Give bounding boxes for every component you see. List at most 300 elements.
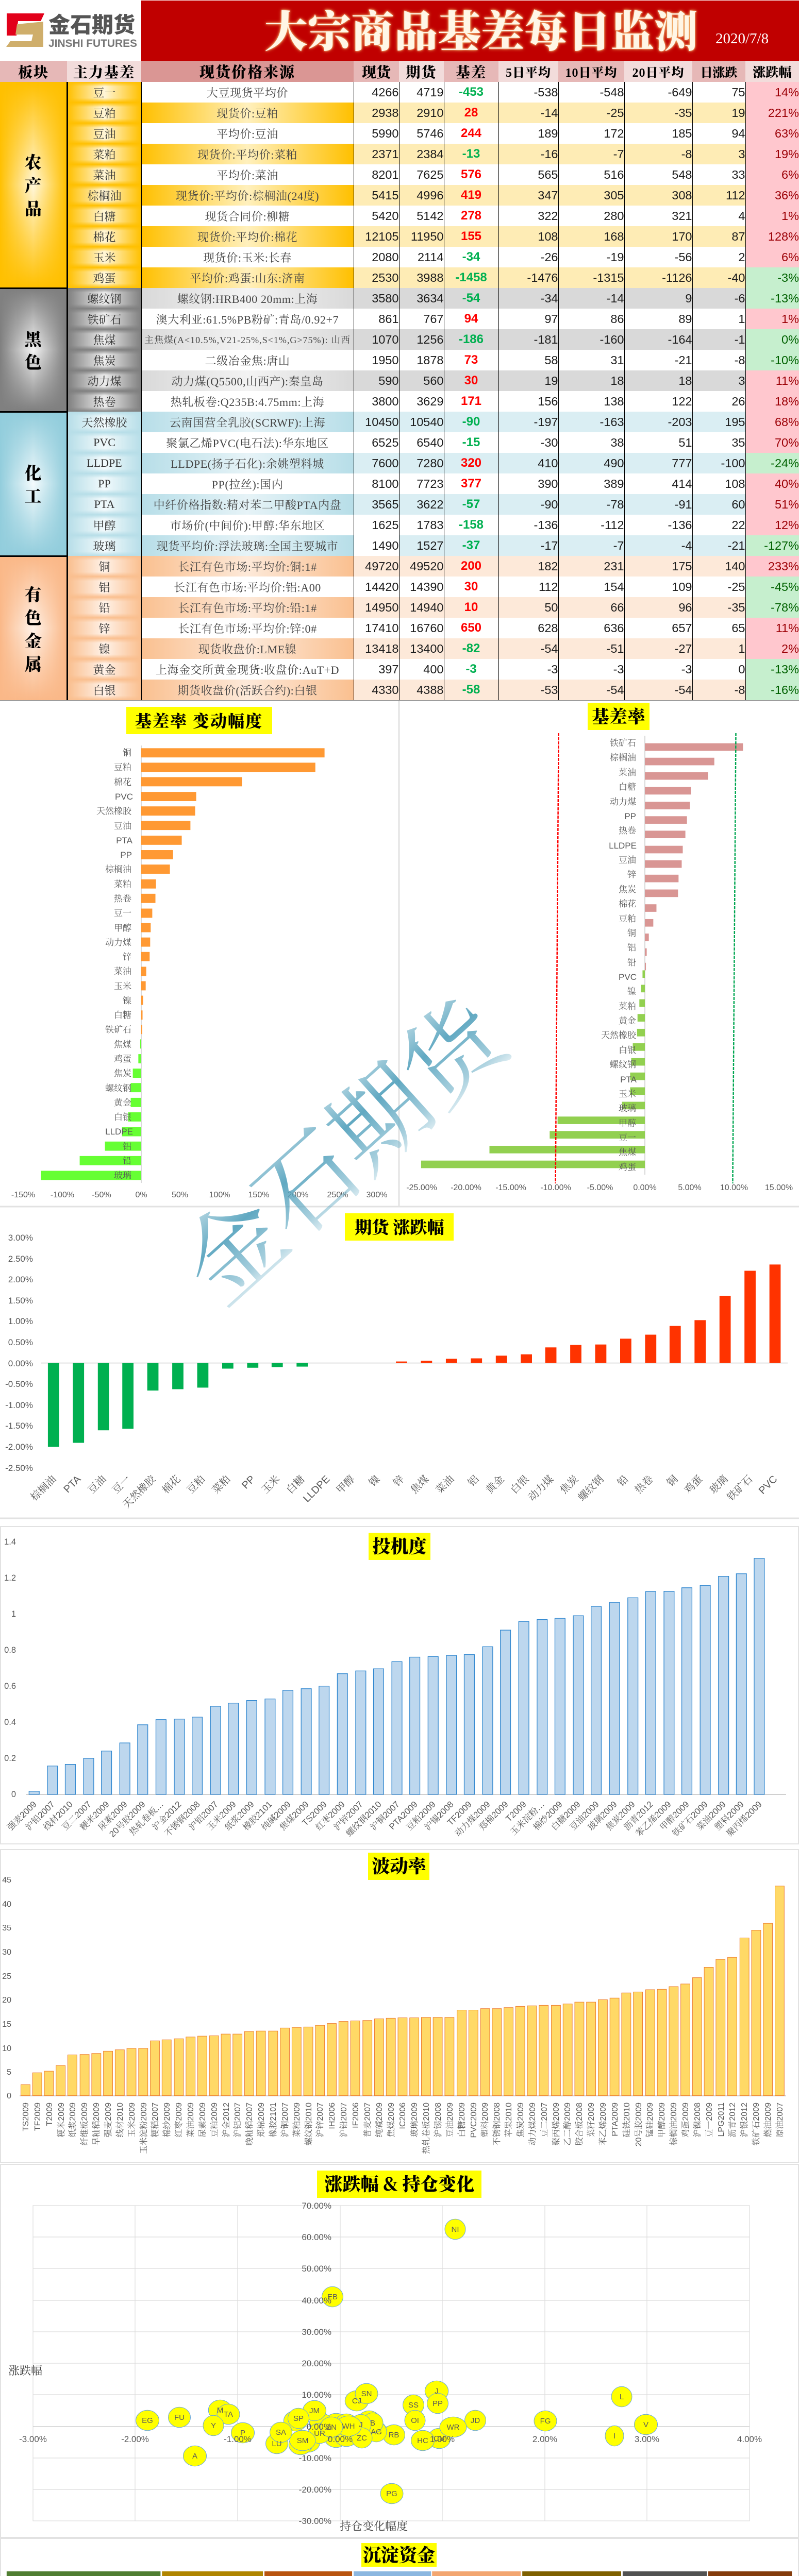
table header row: -4 <box>681 539 692 552</box>
axis ticks <box>11 1191 387 1199</box>
table header row: 89 <box>678 312 692 326</box>
table header row: 322 <box>538 209 558 223</box>
category labels: 棕榈油 <box>105 865 131 874</box>
category labels: 塑料2009 <box>480 2103 490 2138</box>
category labels: 沪锡2008 <box>434 2103 443 2138</box>
table header row: -37 <box>462 538 480 552</box>
table header row: 1950 <box>372 353 399 367</box>
chart: 投机度 column chart <box>4 1533 786 1839</box>
table header row: 636 <box>604 621 624 635</box>
table header row: -54 <box>607 683 624 697</box>
value axis: 0 <box>7 2092 11 2100</box>
value axis: 1.4 <box>4 1537 16 1547</box>
axis ticks: -100% <box>51 1191 74 1199</box>
value axis <box>4 1537 16 1799</box>
axis ticks: 15.00% <box>765 1183 793 1192</box>
category labels: 玻璃 <box>619 1104 636 1113</box>
table header row: 菜油 <box>93 169 115 181</box>
row: 螺纹钢: -14 <box>607 292 624 305</box>
logo: Jinshi Futures: 金石期货 <box>48 8 135 39</box>
table header row: 涨跌幅 <box>753 66 792 79</box>
table header row: 1490 <box>372 539 399 552</box>
row: 豆一: 14% <box>775 86 799 99</box>
row: 豆一: -538 <box>534 86 558 99</box>
table header row: -56 <box>675 250 692 264</box>
bubble labels <box>142 2225 648 2498</box>
value axis: 35 <box>2 1924 11 1933</box>
category labels: 不锈钢2008 <box>492 2103 502 2146</box>
table header row: 玻璃 <box>93 540 115 552</box>
category labels: 铁矿石 <box>610 738 636 748</box>
table header row: 8201 <box>372 168 399 181</box>
category labels: 豆油 <box>86 1473 109 1496</box>
logo: Jinshi Futures: JINSHI FUTURES <box>48 38 137 49</box>
category labels: 棉花 <box>160 1473 183 1496</box>
table header row: -16% <box>771 683 799 697</box>
row: 天然橡胶: -163 <box>600 415 624 429</box>
table header row: 6% <box>781 250 799 264</box>
axis ticks: -50% <box>92 1191 111 1199</box>
category labels: 纤维板2009 <box>80 2103 89 2146</box>
table header row: 10 <box>464 600 478 614</box>
table header row: 现货价:豆粕 <box>217 107 278 120</box>
table header row: 长江有色市场:平均价:铅:1# <box>178 602 317 614</box>
table header row: 628 <box>538 621 558 635</box>
category labels: 焦煤2009 <box>278 1799 311 1833</box>
category labels: 锰硅2009 <box>645 2103 655 2138</box>
table header row: 菜粕 <box>93 148 115 161</box>
table header row: -164 <box>668 333 692 346</box>
category labels: 铅 <box>615 1473 631 1489</box>
table header row: 5420 <box>372 209 399 223</box>
category labels: PTA <box>116 836 133 845</box>
category labels: 锌 <box>627 870 636 879</box>
table header row: 日涨跌 <box>700 66 737 80</box>
table header row: 189 <box>538 127 558 140</box>
bubble labels: SA <box>276 2428 286 2437</box>
category labels: 聚丙烯2009 <box>724 1799 764 1839</box>
table header row: 农 <box>25 149 42 174</box>
category labels: 黄金 <box>619 1016 636 1026</box>
bubble labels: AG <box>371 2428 382 2436</box>
category labels: PP <box>120 850 132 860</box>
row: 铜: 49520 <box>410 560 443 573</box>
category labels: PVC <box>619 972 637 982</box>
category labels: TS2009 <box>300 1799 329 1828</box>
category labels <box>601 738 637 1172</box>
row: 豆一: 豆一 <box>93 87 115 99</box>
table header row: 现货收盘价:LME镍 <box>198 643 296 655</box>
category labels: 菜油 <box>619 768 636 777</box>
heading: 期货 涨跌幅: 期货 涨跌幅 <box>355 1214 444 1239</box>
table header row: 565 <box>538 168 558 181</box>
axis ticks: 50% <box>172 1191 188 1199</box>
category labels: 尿素2009 <box>198 2103 207 2138</box>
table header row: 66 <box>610 601 624 614</box>
axis ticks: 0% <box>135 1191 147 1199</box>
table header row: 86 <box>610 312 624 326</box>
bubble labels: FU <box>174 2413 185 2422</box>
table header row: 白银 <box>93 684 115 697</box>
table header row: 73 <box>464 353 478 367</box>
category labels: 豆一 <box>110 1473 133 1496</box>
table header row: 鸡蛋 <box>93 272 115 284</box>
table header row: 156 <box>538 395 558 408</box>
category labels: 沪银2012 <box>740 2103 749 2138</box>
table header row: -1 <box>735 333 745 346</box>
table header row: -7 <box>613 147 624 161</box>
y axis ticks: 40.00% <box>302 2296 331 2306</box>
table header row: 11950 <box>411 230 443 243</box>
value axis: 30 <box>2 1948 11 1957</box>
table header row: 657 <box>672 621 692 635</box>
table header row: -35 <box>675 106 692 120</box>
table header row: 13418 <box>365 642 399 655</box>
table header row: -186 <box>459 332 484 346</box>
table header row: 128% <box>768 230 799 243</box>
table header row: 5415 <box>372 189 399 202</box>
table header row: 63% <box>775 127 799 140</box>
chart: 基差率 变动幅度 bar chart <box>11 707 387 1199</box>
table header row: 现货价:平均价:菜粕 <box>197 148 297 161</box>
category labels: 镍 <box>627 987 636 996</box>
table header row: -1126 <box>662 271 692 284</box>
axis ticks: 100% <box>209 1191 230 1199</box>
bubble labels: J <box>435 2387 439 2396</box>
table header row: -181 <box>534 333 558 346</box>
category labels: 焦炭 <box>114 1069 131 1078</box>
threshold line: +10% <box>733 733 736 1183</box>
table header row: 1625 <box>372 518 399 532</box>
table header row: 3 <box>738 374 745 387</box>
table header row: -78% <box>771 601 799 614</box>
table header row: -127% <box>764 539 799 552</box>
bubble labels: HC <box>417 2436 428 2445</box>
table header row: 560 <box>423 374 443 387</box>
category labels: 玉米2009 <box>205 1799 238 1833</box>
table header row: 51 <box>678 436 692 449</box>
table header row: -8 <box>735 683 745 697</box>
bubble labels: JD <box>471 2416 480 2425</box>
table header row: 96 <box>678 601 692 614</box>
category labels: 橡胶2101 <box>269 2103 278 2138</box>
table header row: 490 <box>604 456 624 470</box>
table header row: 11% <box>776 621 799 635</box>
row: 天然橡胶 <box>0 412 799 555</box>
table header row: 2 <box>738 250 745 264</box>
category labels: IF2006 <box>352 2103 360 2128</box>
axis ticks: 10.00% <box>720 1183 748 1192</box>
category labels: 天然橡胶 <box>601 1030 637 1040</box>
table header row: 长江有色市场:平均价:锌:0# <box>178 622 317 635</box>
category labels: 胶合板2008 <box>575 2103 584 2146</box>
row: 豆一: 大豆现货平均价 <box>207 87 288 99</box>
treemap tiles <box>7 2571 792 2576</box>
table header row: 172 <box>604 127 624 140</box>
table header row: 221% <box>768 106 799 120</box>
category labels: 鸡蛋 <box>619 1162 636 1172</box>
category labels: 菜粕 <box>210 1473 233 1496</box>
x axis ticks: 3.00% <box>635 2434 659 2444</box>
category labels: 菜油 <box>434 1473 457 1496</box>
row: 铜: 140 <box>725 560 745 573</box>
row: 豆一: 4719 <box>417 86 443 99</box>
row: 豆一: 75 <box>731 86 745 99</box>
bubble labels: SS <box>408 2401 419 2410</box>
category labels <box>6 1799 764 1839</box>
category labels: T2009 <box>504 1799 528 1824</box>
bubble labels: CU <box>434 2434 445 2443</box>
table header row: 7625 <box>417 168 443 181</box>
category labels: 豆一2009 <box>705 2103 714 2138</box>
heading: 投机度: 投机度 <box>372 1533 427 1558</box>
category labels: 纸浆2009 <box>68 2103 77 2138</box>
table header row: 410 <box>538 456 558 470</box>
table header row: 长江有色市场:平均价:铝:A00 <box>174 581 321 594</box>
table header row: -51 <box>607 642 624 655</box>
category labels: 甲醇2009 <box>657 2103 667 2138</box>
bubble labels: NI <box>452 2225 459 2234</box>
category labels: 铁矿石 <box>105 1025 131 1035</box>
axis ticks <box>406 1183 793 1192</box>
table header row: 97 <box>544 312 558 326</box>
category labels: 铜 <box>627 928 636 938</box>
row: 铜: 233% <box>768 560 799 573</box>
x axis ticks: -1.00% <box>224 2434 252 2444</box>
category labels: 20号胶2009 <box>634 2103 643 2146</box>
table header row: 414 <box>672 477 692 490</box>
table header row: 5142 <box>417 209 443 223</box>
category labels: LLDPE <box>609 841 637 851</box>
table header row: -27 <box>675 642 692 655</box>
chart: 波动率 column chart <box>2 1853 786 2154</box>
category labels: 热卷 <box>114 894 131 904</box>
category labels: PVC <box>115 792 133 802</box>
category labels: 燃油2009 <box>763 2103 773 2138</box>
bubbles <box>136 2219 658 2504</box>
value axis: 0.4 <box>4 1718 16 1727</box>
table header row: 现货平均价:浮法玻璃:全国主要城市 <box>157 540 338 552</box>
table header row: 2384 <box>417 147 443 161</box>
bubble labels: I <box>613 2432 615 2441</box>
value axis: 0.00% <box>8 1359 33 1368</box>
category labels: 焦煤 <box>114 1040 131 1049</box>
category labels: 菜籽2009 <box>587 2103 596 2138</box>
category labels: 沪镍2008 <box>693 2103 702 2138</box>
table header row: 0% <box>781 333 799 346</box>
table header row: LLDPE(扬子石化):余姚塑料城 <box>171 457 324 470</box>
category labels: 塑料2009 <box>713 1799 746 1833</box>
row: 螺纹钢: 螺纹钢:HRB400 20mm:上海 <box>177 293 318 305</box>
report date: 2020/7/8 <box>715 30 769 47</box>
category labels: 棉纱2009 <box>162 2103 172 2138</box>
category labels: 菜油2009 <box>695 1799 728 1833</box>
axis ticks: -150% <box>11 1191 35 1199</box>
category labels: 热轧卷板2010 <box>422 2103 431 2154</box>
table header row: 2910 <box>417 106 443 120</box>
table header row: 中纤价格指数:精对苯二甲酸PTA内盘 <box>154 499 341 511</box>
axis ticks: 250% <box>327 1191 348 1199</box>
bubble labels: A <box>192 2452 197 2461</box>
table header row: 58 <box>544 353 558 367</box>
table header row: PP <box>98 477 111 490</box>
table header row: 19 <box>544 374 558 387</box>
row: 螺纹钢: -6 <box>735 292 745 305</box>
bubble labels: EG <box>142 2416 153 2425</box>
category labels: 玉米淀粉2009 <box>139 2103 148 2154</box>
table header row: 18 <box>610 374 624 387</box>
table header row: 黄金 <box>93 664 115 676</box>
table header row: 347 <box>538 189 558 202</box>
table header row: 305 <box>604 189 624 202</box>
category labels: 白糖 <box>114 1010 131 1020</box>
table header row: 280 <box>604 209 624 223</box>
chart: 基差率 bar chart <box>406 703 793 1192</box>
value axis: 1 <box>11 1609 16 1619</box>
table header row: 现货合同价:柳糖 <box>205 210 290 223</box>
category labels: PTA <box>62 1473 84 1495</box>
table header row: 期货 <box>406 65 437 80</box>
category labels: 沪铝2007 <box>187 1799 220 1833</box>
table header row: 期货收盘价(活跃合约):白银 <box>177 684 318 697</box>
table header row: 590 <box>378 374 399 387</box>
bubble labels: P <box>240 2429 245 2437</box>
table header row: 5990 <box>372 127 399 140</box>
value axis: 0 <box>11 1790 16 1799</box>
row: 铜: 175 <box>672 560 692 573</box>
value axis: 40 <box>2 1900 11 1909</box>
category labels: 焦煤 <box>408 1473 431 1496</box>
category labels: 玉米淀粉… <box>508 1799 546 1837</box>
value axis: -1.50% <box>5 1421 33 1431</box>
table header row: 13400 <box>410 642 443 655</box>
row: 铜: 200 <box>461 559 481 573</box>
table header row: -21 <box>728 539 745 552</box>
category labels: 沪锡2008 <box>423 1799 456 1833</box>
category labels: 铅 <box>627 958 636 968</box>
category labels <box>22 2103 785 2154</box>
y axis ticks: 20.00% <box>302 2359 331 2368</box>
table header row: 60 <box>731 498 745 511</box>
table header row: 390 <box>538 477 558 490</box>
value axis: 20 <box>2 1996 11 2005</box>
axis ticks: 300% <box>367 1191 387 1199</box>
category labels: 鸡蛋2009 <box>681 2103 690 2138</box>
value axis: -2.00% <box>5 1442 33 1452</box>
value axis: 0.50% <box>8 1337 33 1347</box>
table header row: 黑 <box>25 326 42 350</box>
category labels: 沥青2012 <box>728 2103 737 2138</box>
table header row: 861 <box>378 312 399 326</box>
logo: Jinshi Futures <box>0 0 141 61</box>
category labels: 动力煤 <box>610 797 636 807</box>
table header row: -57 <box>462 497 480 511</box>
table header row: 现货价:平均价:棉花 <box>197 231 297 243</box>
table header row: 锌 <box>98 622 110 635</box>
category labels: TS2009 <box>22 2103 30 2131</box>
table header row: 94 <box>731 127 745 140</box>
table header row: -3 <box>681 663 692 676</box>
category labels: 线材2010 <box>115 2103 125 2138</box>
axis ticks: -15.00% <box>495 1183 526 1192</box>
table header row: -3 <box>465 662 477 676</box>
table header row: -90 <box>541 498 558 511</box>
value axis: 0.6 <box>4 1682 16 1691</box>
value axis: 5 <box>7 2068 11 2077</box>
table header row: -3 <box>547 663 558 676</box>
heading: 基差率: 基差率 <box>592 703 646 728</box>
bubble labels: EB <box>327 2293 338 2301</box>
value axis: 1.2 <box>4 1573 16 1583</box>
row: 天然橡胶: -90 <box>462 415 480 429</box>
table header row: -16 <box>541 147 558 161</box>
value axis: -0.50% <box>5 1379 33 1389</box>
table header row: 108 <box>538 230 558 243</box>
category labels: TF2009 <box>34 2103 42 2131</box>
category labels: 铝 <box>627 943 636 953</box>
table header row: 化 <box>25 460 42 484</box>
category labels: 晚籼稻2007 <box>245 2103 254 2146</box>
row: 天然橡胶: -203 <box>668 415 692 429</box>
table header row: 112 <box>539 580 558 594</box>
table header row: 有 <box>25 582 42 606</box>
table header row: -112 <box>601 518 624 532</box>
table header row: 现货价:平均价:棕榈油(24度) <box>176 190 319 202</box>
table header row: 4330 <box>372 683 399 697</box>
table header row: 主焦煤(A<10.5%,V21-25%,S<1%,G>75%): 山西 <box>144 335 351 345</box>
category labels: 焦炭2009 <box>604 1799 637 1833</box>
category labels: 镍 <box>367 1473 382 1489</box>
value axis: 10 <box>2 2044 11 2053</box>
y axis ticks: -30.00% <box>299 2516 331 2526</box>
table header row: 33 <box>731 168 745 181</box>
table header row: PTA <box>94 498 114 511</box>
value axis: -2.50% <box>5 1463 33 1473</box>
category labels: 强麦2009 <box>6 1799 39 1833</box>
table header row: -35 <box>728 601 745 614</box>
table header row: LLDPE <box>87 456 122 469</box>
table header row: -78 <box>607 498 624 511</box>
table header row: 28 <box>464 106 478 120</box>
category labels: 焦炭 <box>558 1473 581 1496</box>
category labels: 纸浆2009 <box>223 1799 256 1833</box>
table header row: 4996 <box>417 189 443 202</box>
value axis: 1.50% <box>8 1296 33 1306</box>
table header row: 铝 <box>98 581 110 594</box>
table header row: 3 <box>738 147 745 161</box>
table header row: 铁矿石 <box>87 313 122 326</box>
category labels: 玻璃 <box>114 1171 131 1180</box>
category labels: 沪锌2007 <box>315 2103 325 2138</box>
table header row: 16760 <box>410 621 443 635</box>
table header row: 154 <box>604 580 624 594</box>
table header row: -24% <box>771 456 799 470</box>
table header row: -19 <box>607 250 624 264</box>
table header row: -8 <box>735 353 745 367</box>
x axis ticks: 1.00% <box>430 2434 455 2444</box>
table header row: 377 <box>461 477 481 490</box>
category labels: 白糖2009 <box>457 2103 467 2138</box>
category labels: 豆一 <box>114 908 131 918</box>
table header row: 6525 <box>372 436 399 449</box>
table header row: -1476 <box>527 271 558 284</box>
table header row: 419 <box>461 188 481 202</box>
heading: 涨跌幅 & 持仓变化: 涨跌幅 & 持仓变化 <box>325 2171 474 2196</box>
bubble labels: J <box>359 2420 363 2429</box>
table header row: 1878 <box>417 353 443 367</box>
table header row: -8 <box>681 147 692 161</box>
table header row: 12105 <box>365 230 399 243</box>
